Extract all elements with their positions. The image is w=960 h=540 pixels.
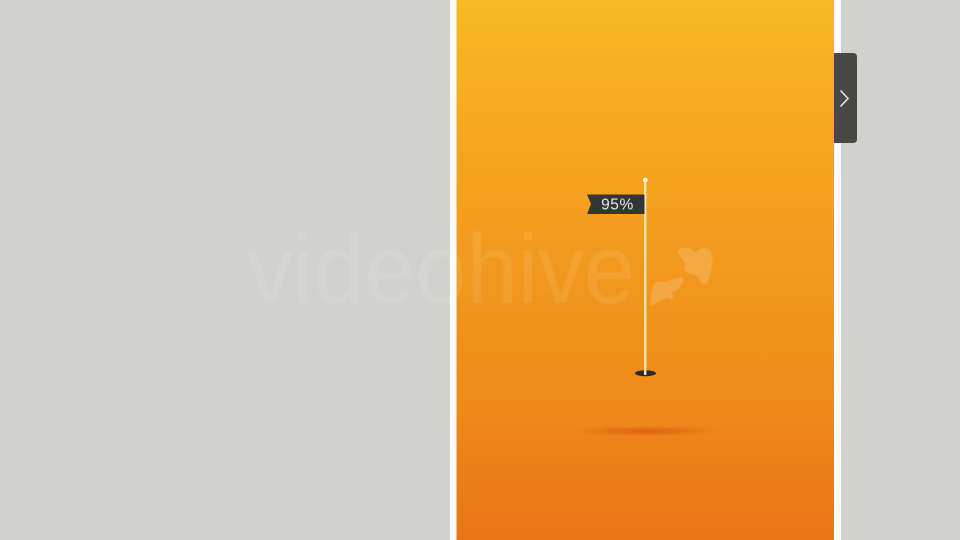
watermark icon: upper leaf (678, 248, 712, 284)
watermark (247, 214, 712, 324)
flag shape (587, 194, 644, 214)
icon: chevron right (840, 90, 848, 106)
flag pole chart (587, 178, 656, 376)
tab body (834, 53, 857, 143)
pole (644, 180, 646, 375)
panel: orange gradient (456, 0, 834, 540)
hole ellipse (635, 370, 656, 376)
pole top dot (643, 178, 648, 182)
ground shadow (566, 425, 726, 437)
navigation tab (834, 53, 857, 143)
watermark text: videohive (247, 214, 635, 324)
flag with value (587, 194, 644, 214)
watermark icon: lower leaf (650, 277, 683, 305)
value label: 95% (601, 197, 634, 214)
panel: white card (450, 0, 841, 540)
